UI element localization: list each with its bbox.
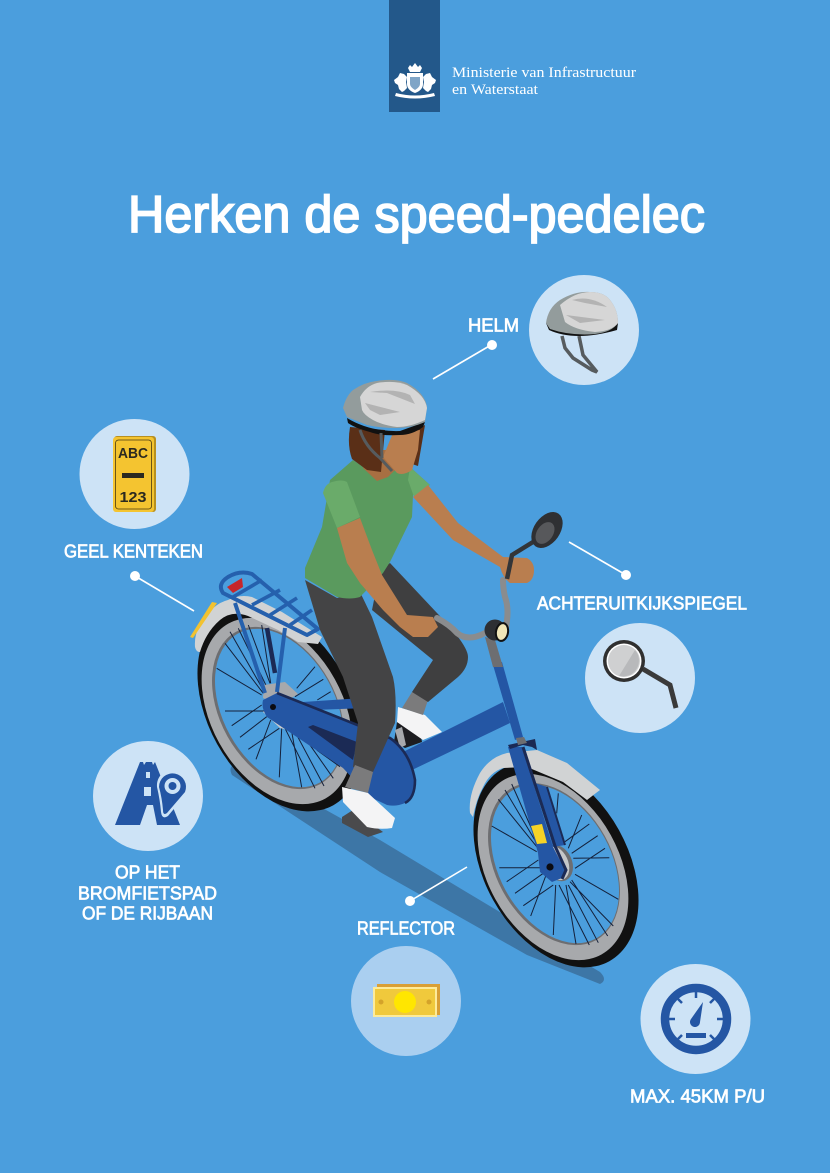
headlamp: [484, 620, 511, 643]
right arm: [413, 485, 534, 583]
near leg: [305, 580, 396, 829]
crank arm: [395, 727, 406, 748]
bicycle frame: [403, 637, 527, 770]
yellow number plate on rear: [190, 602, 217, 638]
rear wheel spokes: [217, 625, 340, 788]
callout: op het bromfietspad of de rijbaan: BROMFIETSPAD: [78, 884, 217, 904]
front fork: [508, 739, 566, 882]
callout: helm: HELM: [468, 316, 519, 336]
helmet on rider: [343, 380, 427, 471]
shirt sleeve: [323, 480, 360, 528]
rear fender: [195, 596, 322, 652]
title: Herken de speed-pedelec: [128, 186, 705, 244]
icon: yellow plate: 123: [120, 490, 146, 506]
luggage rack: [221, 573, 318, 693]
neck: [363, 450, 397, 481]
front wheel: [440, 734, 672, 996]
callout: geel kenteken: [64, 419, 203, 611]
callout: op het bromfietspad of de rijbaan: OF DE RIJBAAN: [82, 904, 213, 924]
logo: Rijksoverheid ribbon with coat of arms: [389, 0, 440, 112]
pointer line: [405, 867, 467, 906]
callout: max 45 km/u: [630, 964, 765, 1106]
rider's mirror: [507, 506, 569, 579]
pointer line: [433, 340, 497, 379]
front hub: [537, 840, 579, 886]
callout: geel kenteken: GEEL KENTEKEN: [64, 542, 203, 562]
far crank: [394, 722, 422, 748]
callout: achteruitkijkspiegel: ACHTERUITKIJKSPIEGEL: [537, 594, 747, 614]
callout: op het bromfietspad of de rijbaan: [78, 741, 217, 924]
chain stay: [303, 698, 367, 710]
bicycle shadow: [230, 766, 604, 984]
fork reflector: [531, 824, 547, 844]
left arm: [337, 518, 438, 637]
callout: op het bromfietspad of de rijbaan: OP HET: [115, 862, 180, 882]
near shoe: [342, 787, 395, 829]
callout: achteruitkijkspiegel: [537, 542, 747, 733]
rear wheel: [164, 578, 396, 840]
ministry name: Ministerie van Infrastructuur: [452, 65, 636, 81]
pedal: [342, 810, 383, 837]
ministry name: [452, 65, 636, 98]
icon: yellow plate: [113, 436, 156, 512]
chain guard: [262, 693, 415, 806]
callout: reflector: [351, 867, 467, 1056]
callout: max 45 km/u: MAX. 45KM P/U: [630, 1086, 765, 1106]
shirt: [305, 460, 430, 598]
front wheel spokes: [492, 784, 618, 945]
helmet straps: [360, 430, 392, 471]
pointer line: [130, 571, 194, 611]
icon: helmet: [546, 292, 618, 372]
face: [383, 430, 420, 474]
far lower leg: [397, 692, 442, 740]
hair: [349, 425, 425, 472]
icon: mirror: [603, 640, 676, 708]
icon: yellow plate: ABC: [118, 446, 148, 462]
handlebar: [437, 580, 508, 638]
front fender: [470, 750, 600, 817]
pointer line: [569, 542, 631, 580]
icon: speedometer: [665, 988, 727, 1050]
callout: helm: [433, 275, 639, 385]
ministry name: en Waterstaat: [452, 82, 539, 98]
icon: reflector: [373, 984, 440, 1017]
far leg: [372, 563, 468, 702]
icon: road with pin: [115, 762, 189, 825]
callout: reflector: REFLECTOR: [357, 918, 455, 938]
